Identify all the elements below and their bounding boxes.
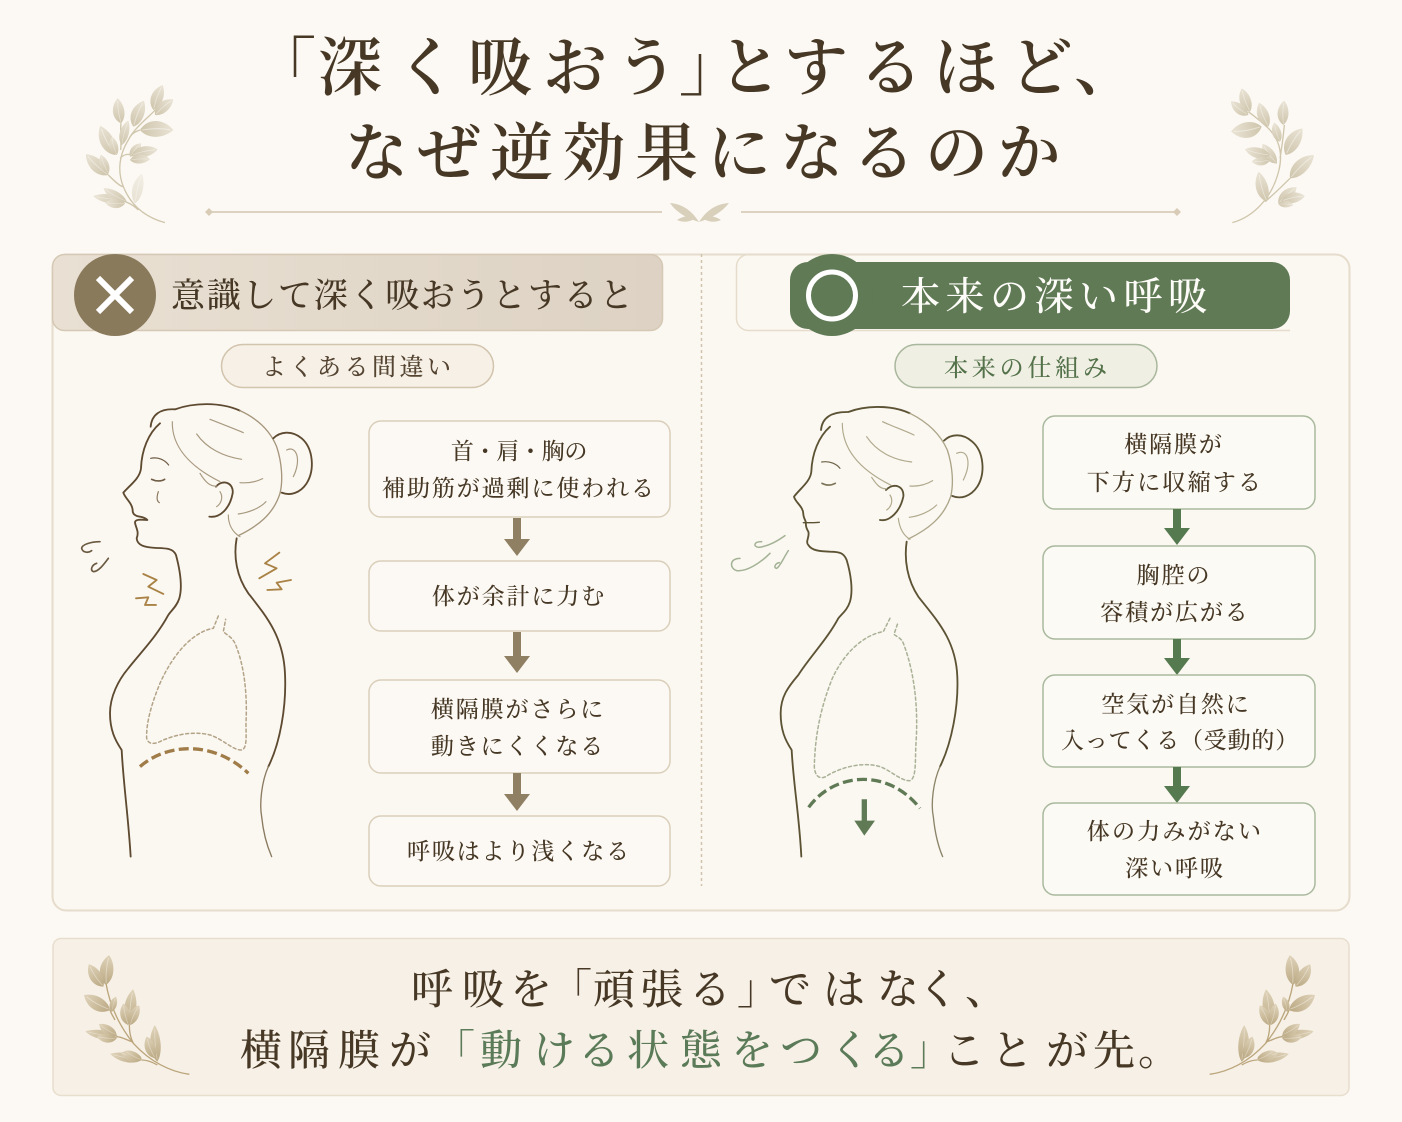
illustration: tense woman profile (82, 404, 312, 857)
step: diaphragm stiff (369, 680, 670, 773)
heading: wrong way (52, 254, 662, 336)
panel: natural way (732, 254, 1335, 895)
conclusion text: ことが先。 (943, 1029, 1180, 1075)
step: accessory muscles (369, 421, 670, 517)
heading: natural deep breathing (736, 254, 1335, 336)
step: accessory muscles: 補助筋が過剰に使われる (382, 476, 656, 501)
step: body tenses: 体が余計に力む (432, 584, 606, 609)
step: diaphragm contracts: 横隔膜が (1124, 432, 1224, 457)
step: relaxed deep breath: 体の力みがない (1087, 819, 1263, 844)
diaphragm lowered (809, 779, 920, 808)
flow: wrong way steps (369, 421, 670, 886)
flow: natural way steps (1043, 416, 1315, 895)
strain marks (136, 553, 291, 605)
title: 「深く吸おう」とするほど、 (252, 33, 1138, 104)
arrow (1164, 639, 1190, 675)
arrow (504, 632, 530, 673)
diaphragm tense (140, 749, 248, 773)
main comparison panel (52, 254, 1350, 910)
step: relaxed deep breath: 深い呼吸 (1125, 856, 1225, 881)
step: body tenses (369, 561, 670, 631)
arrow (1164, 767, 1190, 803)
step: chest expands: 胸腔の (1137, 563, 1211, 588)
step: diaphragm contracts: 下方に収縮する (1087, 470, 1263, 495)
panel: wrong way (52, 254, 670, 886)
conclusion text (240, 968, 1180, 1075)
icon: leaf branch bottom left (80, 954, 189, 1074)
step: shallower breath: 呼吸はより浅くなる (407, 839, 631, 864)
lung outline (147, 616, 246, 750)
title: なぜ逆効果になるのか (345, 119, 1070, 189)
step: chest expands (1043, 546, 1315, 639)
step: chest expands: 容積が広がる (1100, 600, 1250, 625)
breath wind marks (732, 536, 788, 571)
step: diaphragm contracts (1043, 416, 1315, 509)
arrow: diaphragm downward (854, 799, 875, 836)
title (252, 33, 1138, 189)
icon: leaf branch bottom right (1210, 954, 1319, 1074)
sub-heading pill: natural mechanism (895, 344, 1157, 388)
step: air enters (1043, 675, 1315, 767)
conclusion text: 横隔膜が (240, 1029, 431, 1075)
step: diaphragm stiff: 横隔膜がさらに (431, 697, 605, 722)
sub-heading pill: natural mechanism: 本来の仕組み (944, 355, 1111, 382)
arrow (504, 773, 530, 811)
arrow (504, 518, 530, 556)
step: air enters: 空気が自然に (1101, 692, 1251, 717)
conclusion text: 「動ける状態をつくる」 (433, 1028, 952, 1075)
step: diaphragm stiff: 動きにくくなる (431, 734, 605, 759)
lung outline (814, 618, 917, 781)
arrow (1164, 509, 1190, 545)
panel: conclusion banner (53, 938, 1349, 1096)
icon: leaf branch top left (81, 83, 176, 223)
short breath marks (82, 542, 108, 572)
conclusion text: 呼吸を「頑張る」ではなく、 (411, 968, 1007, 1014)
step: shallower breath (369, 816, 670, 886)
step: accessory muscles: 首・肩・胸の (451, 439, 587, 464)
icon: leaf branch top right (1228, 87, 1318, 223)
step: air enters: 入ってくる（受動的） (1061, 728, 1299, 753)
sub-heading pill: common mistake: よくある間違い (262, 354, 454, 381)
title divider ornament (205, 203, 1181, 222)
heading: wrong way: 意識して深く吸おうとすると (171, 277, 635, 315)
heading: natural deep breathing: 本来の深い呼吸 (901, 276, 1213, 319)
illustration: relaxed woman profile (732, 407, 983, 857)
step: relaxed deep breath (1043, 803, 1315, 895)
sub-heading pill: common mistake (222, 344, 494, 388)
